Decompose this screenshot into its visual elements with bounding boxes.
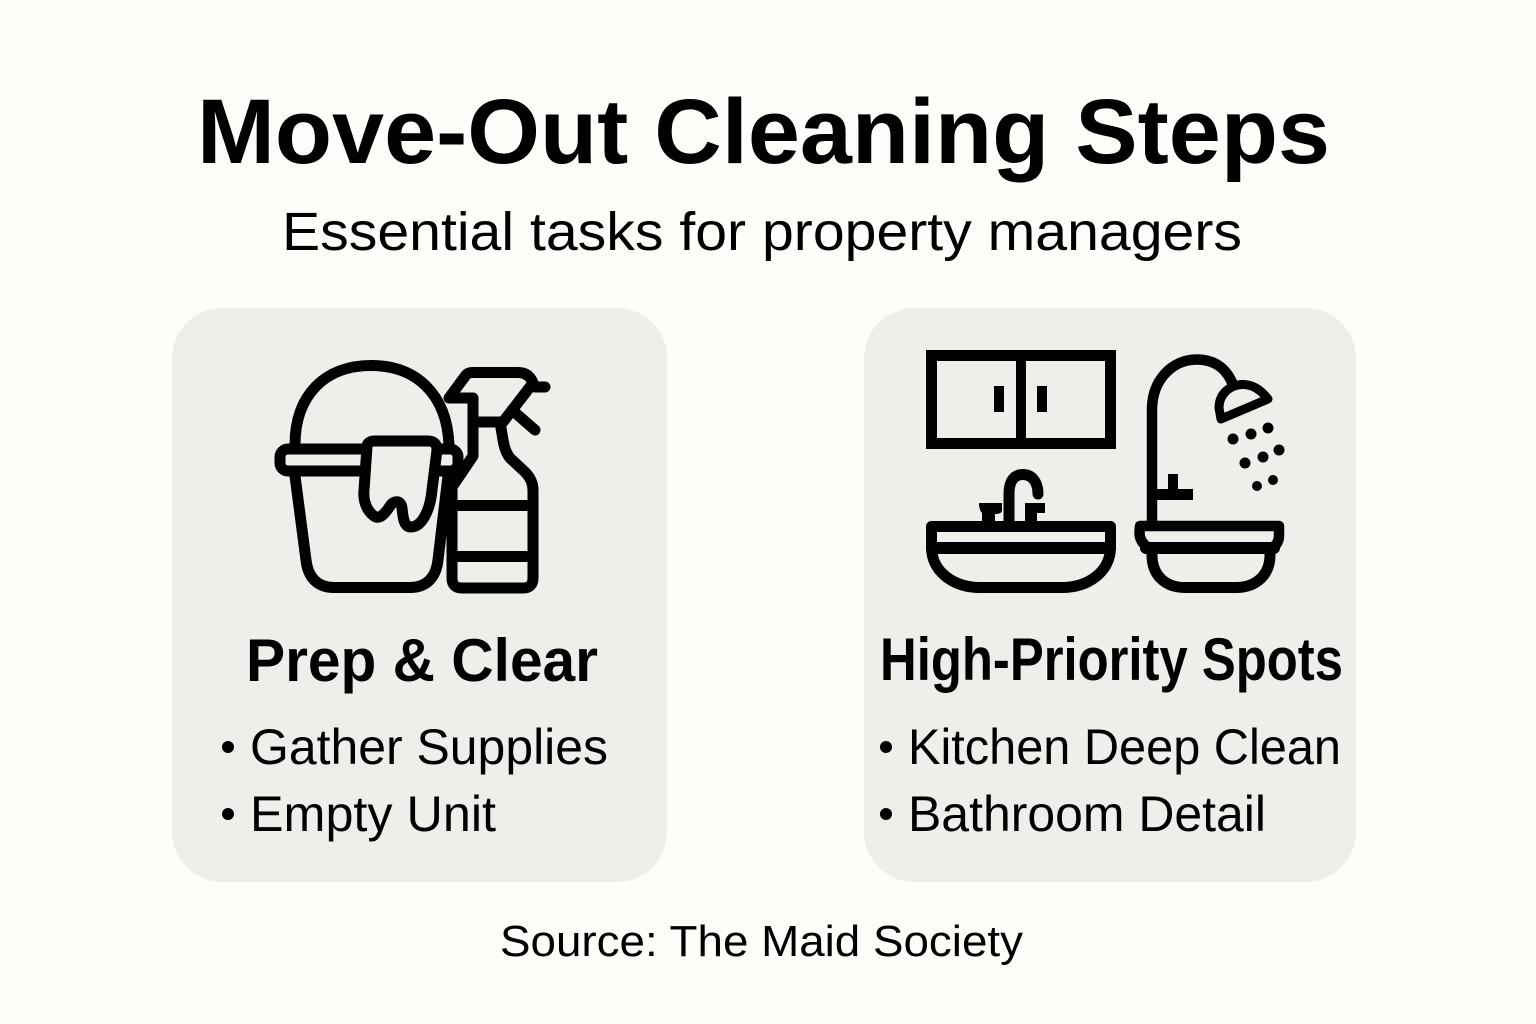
bullet: empty unit: Empty Unit bbox=[250, 786, 496, 842]
icon: bucket and spray bottle bbox=[280, 366, 545, 588]
subtitle: Essential tasks for property managers bbox=[282, 202, 1242, 262]
panel: high-priority spots bbox=[864, 308, 1356, 882]
title: Move-Out Cleaning Steps bbox=[197, 81, 1330, 183]
bullet: gather supplies: Gather Supplies bbox=[250, 719, 608, 775]
icon: cabinet bbox=[932, 355, 1110, 444]
panel: prep and clear bbox=[172, 308, 667, 882]
heading: high-priority spots: High-Priority Spots bbox=[880, 626, 1343, 693]
bullet: bathroom detail: Bathroom Detail bbox=[908, 786, 1266, 842]
source note: Source: The Maid Society bbox=[500, 917, 1023, 966]
heading: prep and clear: Prep & Clear bbox=[246, 627, 598, 694]
bullet: kitchen deep clean: Kitchen Deep Clean bbox=[908, 719, 1341, 775]
icon: sink bbox=[932, 474, 1110, 588]
icon: shower and tub bbox=[1140, 360, 1284, 588]
icon: cabinet, sink and shower bbox=[932, 355, 1284, 588]
